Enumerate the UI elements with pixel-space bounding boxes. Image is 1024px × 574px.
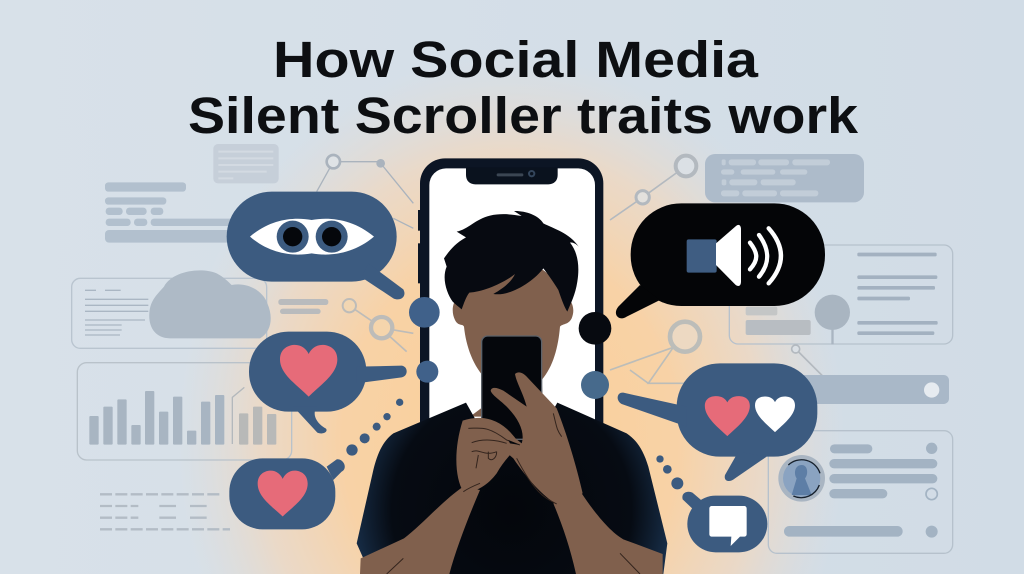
hair [444, 211, 579, 312]
profile card [729, 245, 953, 344]
top right note card [705, 154, 864, 202]
avatar [778, 455, 825, 502]
text block pills [105, 182, 240, 243]
person [357, 211, 667, 574]
speech bubble: eyes [227, 192, 404, 299]
left background panels [72, 144, 413, 529]
icon: speaker [687, 225, 781, 286]
feed card [768, 431, 953, 553]
icon: heart [280, 345, 337, 397]
dotted trail right [656, 455, 683, 489]
notch [466, 167, 558, 184]
speech bubble: heart [249, 332, 407, 433]
speech bubble: comment [682, 492, 767, 552]
network nodes right lower [610, 322, 823, 383]
phone frame [420, 158, 603, 458]
network nodes right top [610, 156, 696, 220]
shirt [357, 403, 667, 574]
right background panels [610, 154, 953, 553]
phone side buttons [418, 210, 421, 283]
icon: small heart [258, 471, 308, 517]
bar chart card [77, 363, 292, 460]
icon: red heart [705, 396, 750, 436]
handheld phone [482, 336, 542, 439]
phone [418, 158, 603, 458]
arm left [360, 487, 480, 574]
dotted trail left [346, 399, 403, 456]
hand left [456, 418, 522, 492]
icon: white heart [755, 397, 795, 432]
search bar [797, 375, 949, 404]
hand creases [387, 413, 640, 574]
phone screen [429, 168, 595, 458]
title [188, 31, 859, 144]
neck and face [453, 261, 573, 417]
faint note card [213, 144, 279, 183]
speech bubble: small heart [229, 458, 345, 529]
title: Silent Scroller traits work [188, 87, 859, 144]
icon: eyes [250, 219, 374, 255]
hand right [482, 372, 583, 504]
cloud card [72, 270, 328, 348]
speech bubble: speaker [616, 203, 825, 318]
speech bubble: two hearts [618, 363, 817, 481]
dashed caption rows [100, 494, 230, 529]
icon: comment [709, 506, 747, 546]
title: How Social Media [273, 31, 759, 88]
arm right [553, 493, 663, 574]
network nodes left [317, 155, 413, 352]
connector dots on phone [409, 297, 611, 399]
